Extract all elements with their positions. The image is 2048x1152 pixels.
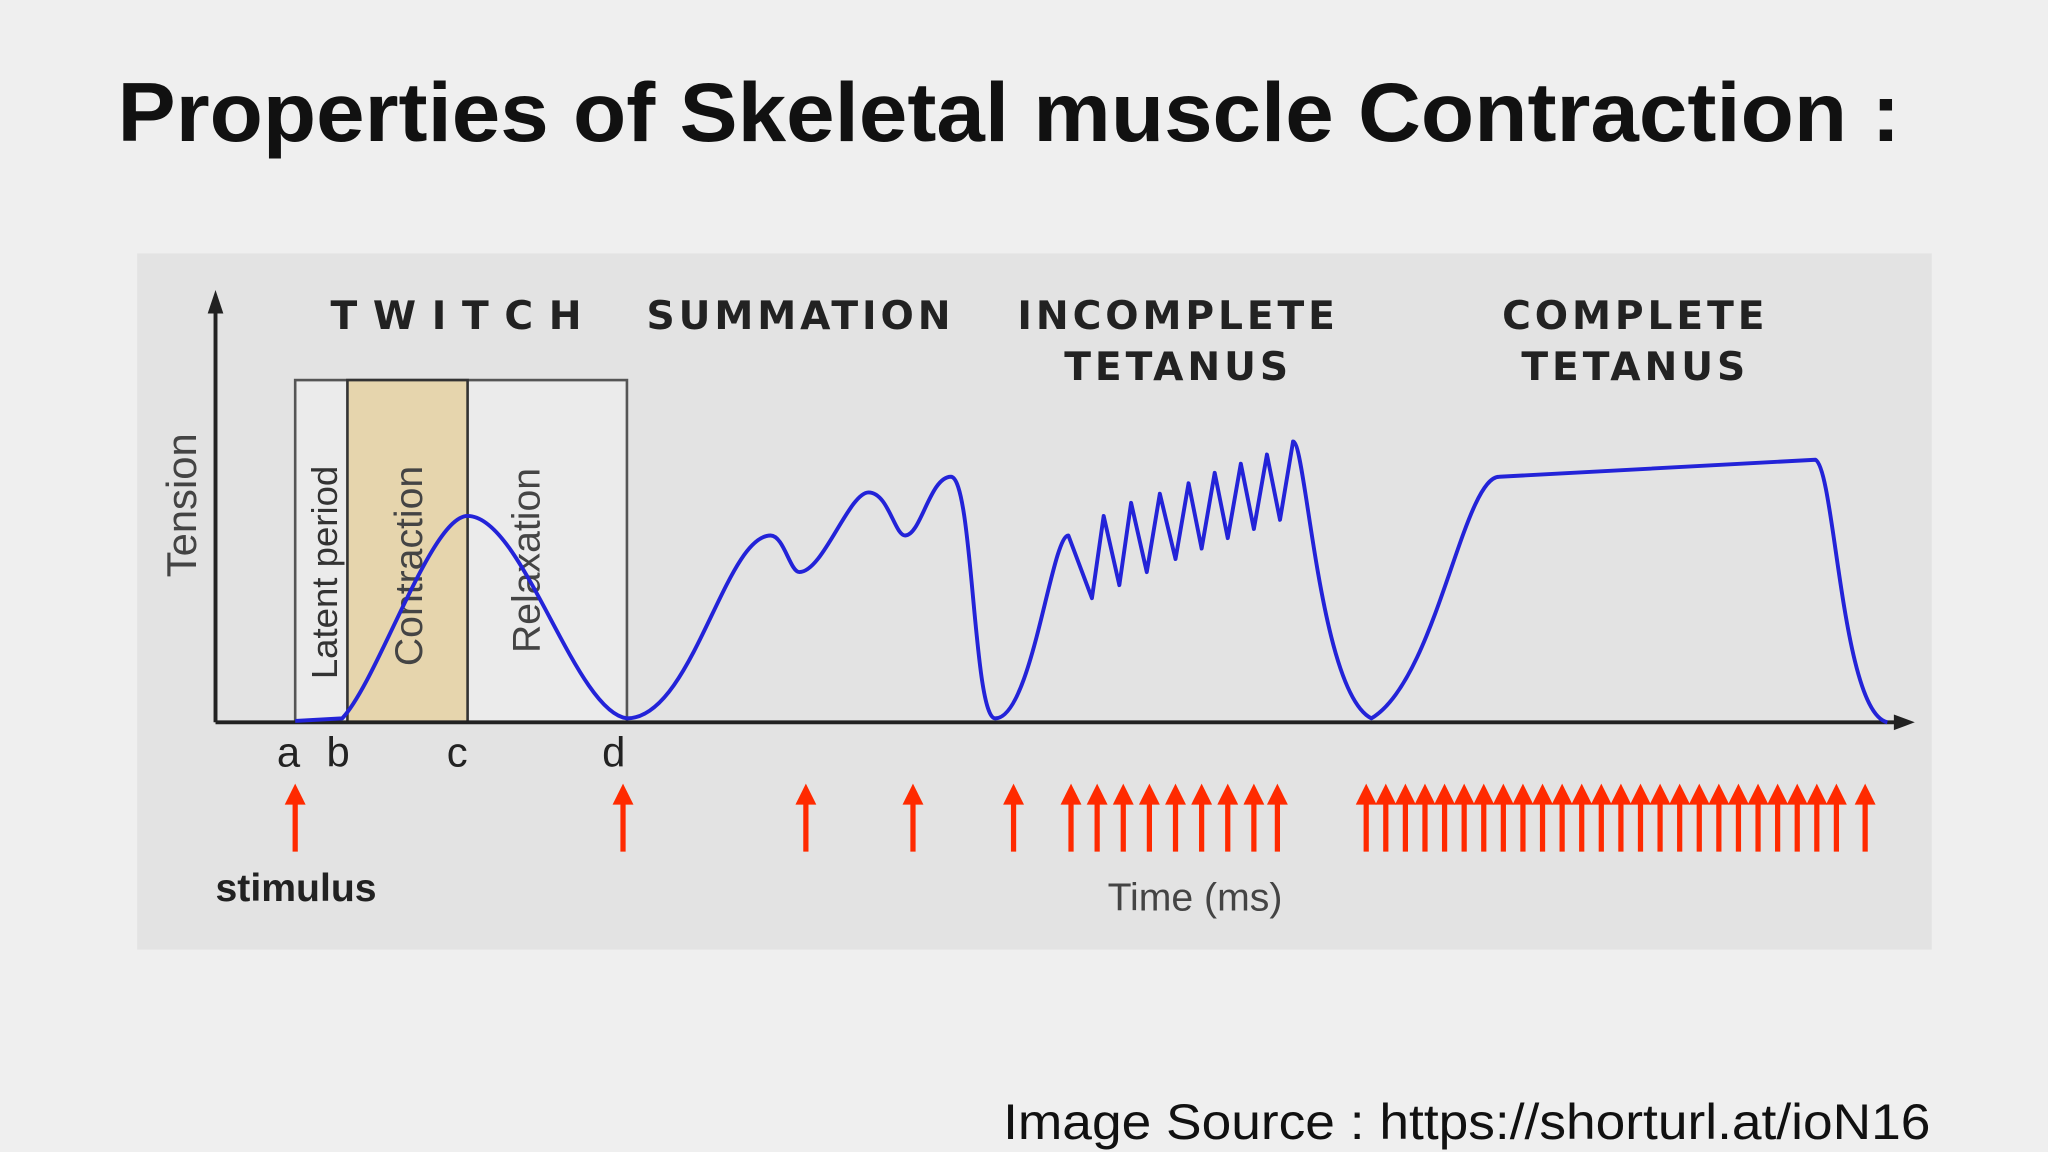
tension curve (295, 441, 1887, 722)
twitch box (295, 380, 627, 722)
phase headings: INCOMPLETE (1017, 294, 1339, 339)
axes (208, 290, 1915, 730)
point labels: b (327, 729, 350, 776)
panel: chart (137, 253, 1932, 950)
point labels: a (277, 729, 301, 776)
y axis label: Tension (158, 433, 205, 577)
phase headings: TETANUS (1521, 345, 1749, 390)
time label: Time (ms) (1108, 876, 1282, 919)
twitch box: Latent period (304, 466, 345, 679)
point labels: c (447, 729, 468, 776)
phase headings: TWITCH (330, 294, 597, 339)
twitch box: Relaxation (505, 468, 548, 653)
source footer: Image Source : https://shorturl.at/ioN16 (1003, 1094, 1930, 1150)
phase headings: COMPLETE (1502, 294, 1768, 339)
stimulus label: stimulus (216, 867, 377, 910)
point labels: d (602, 729, 625, 776)
phase headings (330, 294, 1768, 390)
phase headings: TETANUS (1064, 345, 1292, 390)
title: Properties of Skeletal muscle Contraction : (118, 65, 1900, 159)
point labels (277, 729, 625, 776)
phase headings: SUMMATION (647, 294, 954, 339)
stimulus arrows (285, 784, 1876, 852)
twitch box: Contraction (388, 466, 431, 666)
